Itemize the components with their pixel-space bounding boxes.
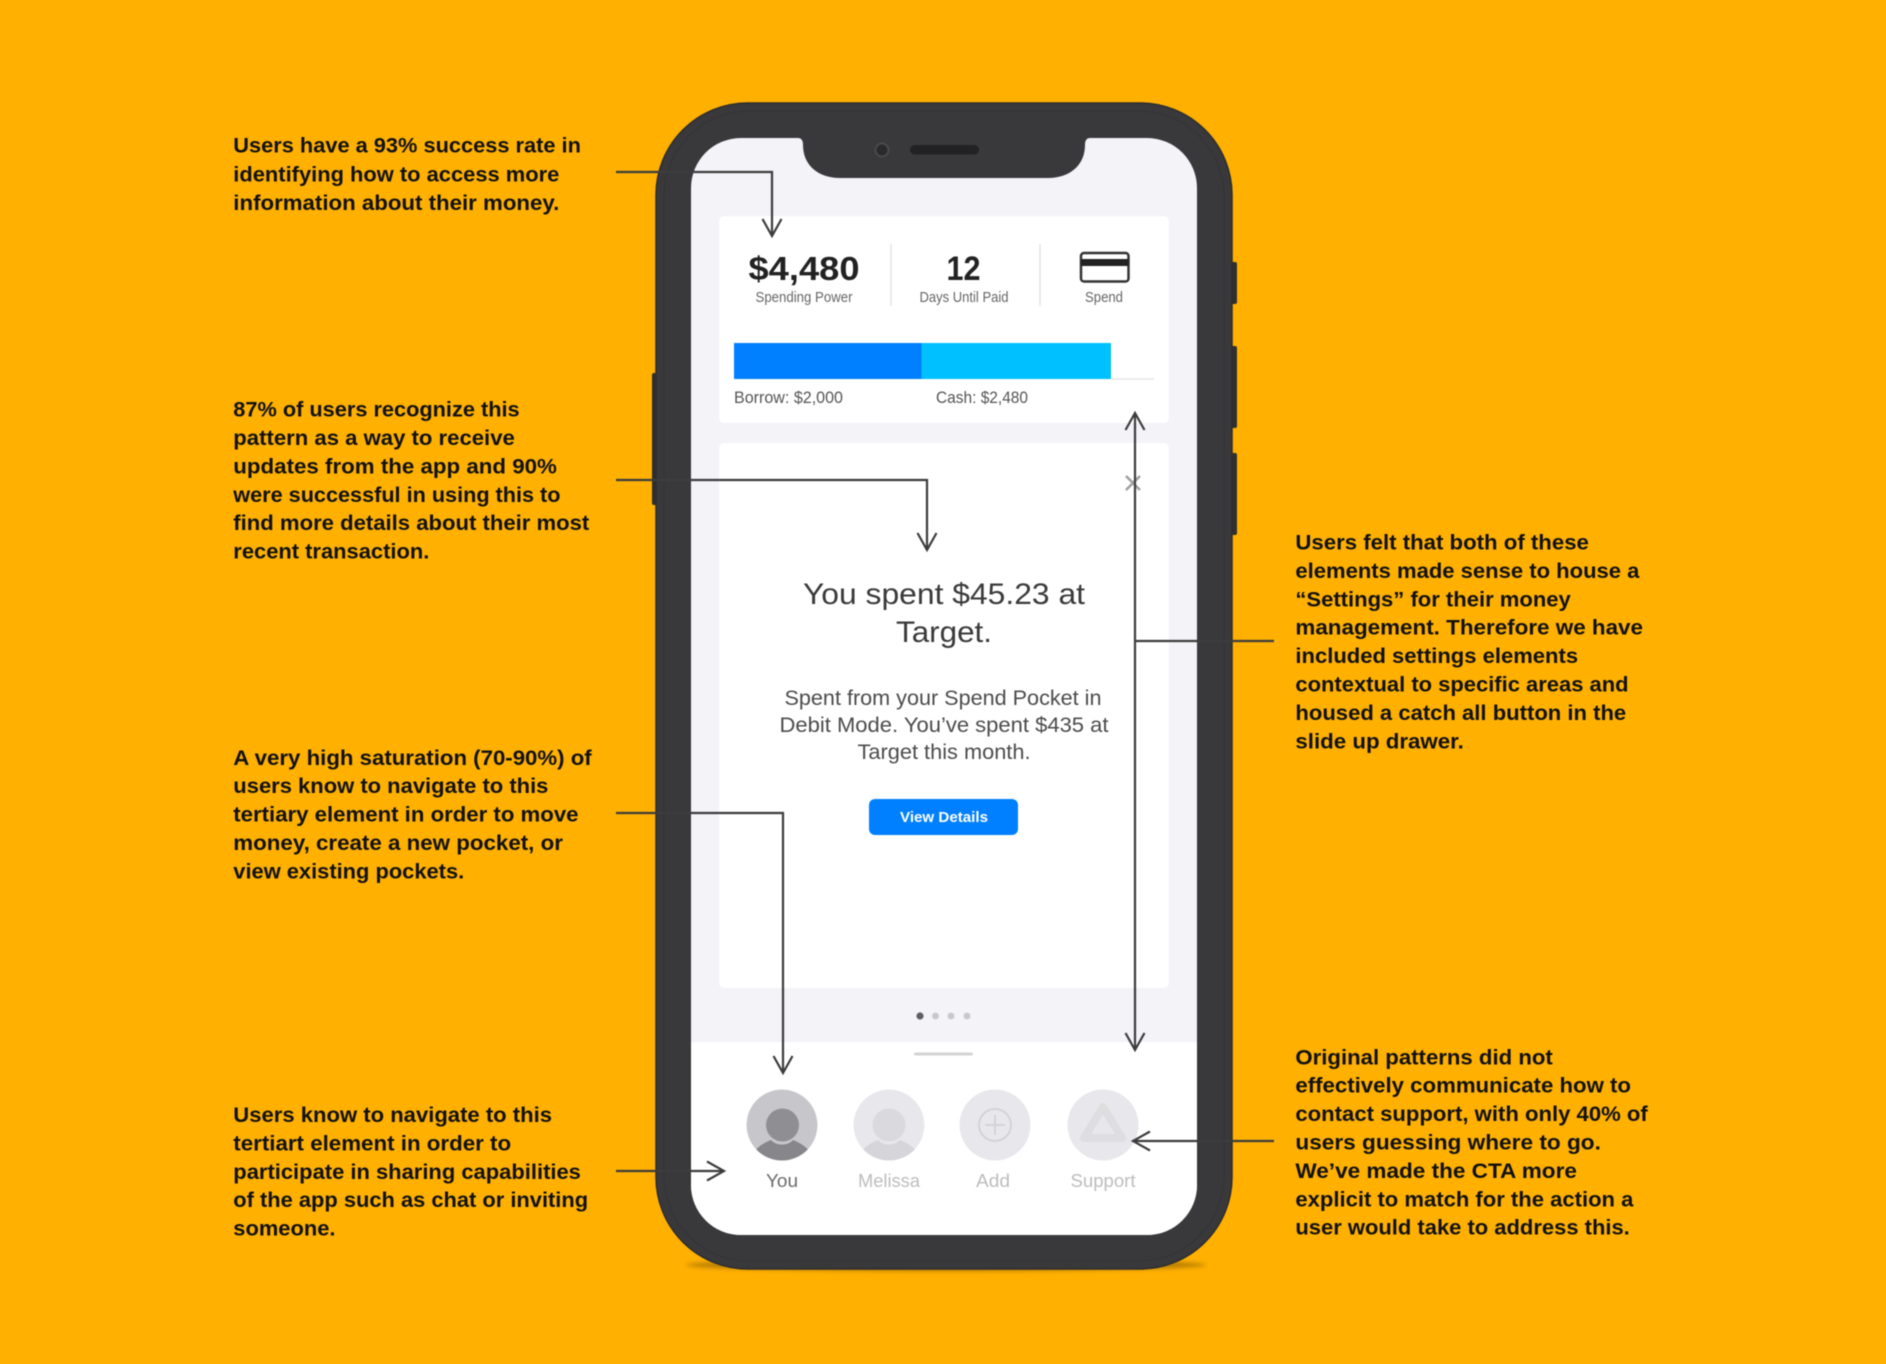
- arrow: settings bracket: [1126, 413, 1274, 1050]
- notification heading: You spent $45.23 at: [803, 578, 1085, 611]
- notification body: Debit Mode. You’ve spent $435 at: [780, 714, 1109, 737]
- callout: tertiary element saturation: view existing pockets.: [233, 859, 464, 883]
- view details button: [869, 799, 1018, 835]
- callout: sharing capabilities: of the app such as chat or inviting: [233, 1188, 588, 1212]
- bottom drawer: [691, 1042, 1197, 1235]
- callout: support: user would take to address this.: [1295, 1216, 1630, 1240]
- drag handle: [914, 1052, 973, 1056]
- callout: settings: contextual to specific areas and: [1295, 672, 1629, 696]
- arrow: to sharing area: [616, 1162, 724, 1180]
- icon: close: [1126, 476, 1140, 490]
- avatar: melissa: [854, 1090, 924, 1162]
- spending power label: Spending Power: [756, 290, 853, 306]
- callout: updates pattern: were successful in using this to: [232, 483, 560, 507]
- balance bar: [734, 343, 1154, 379]
- arrow: to notification card: [616, 480, 936, 550]
- callout: success rate: information about their money.: [233, 191, 559, 215]
- notch: [798, 138, 1090, 178]
- callout: tertiary element saturation: users know to navigate to this: [233, 774, 549, 798]
- callout: tertiary element saturation: [233, 746, 593, 883]
- pagination dots: [916, 1012, 970, 1020]
- borrow label: Borrow: $2,000: [734, 389, 843, 407]
- callout: updates pattern: find more details about their most: [233, 511, 589, 535]
- callout: tertiary element saturation: A very high saturation (70-90%) of: [233, 746, 593, 770]
- callout: support: users guessing where to go.: [1295, 1130, 1601, 1154]
- callout: tertiary element saturation: tertiary element in order to move: [233, 803, 579, 827]
- screen background: [691, 138, 1197, 1235]
- callout: tertiary element saturation: money, create a new pocket, or: [233, 831, 563, 855]
- phone body: [656, 103, 1232, 1269]
- days until paid label: Days Until Paid: [920, 290, 1008, 306]
- spending power value: $4,480: [748, 250, 860, 287]
- callout: settings: management. Therefore we have: [1295, 616, 1643, 640]
- support label: Support: [1070, 1171, 1136, 1191]
- arrow: to support: [1133, 1132, 1274, 1150]
- callout: updates pattern: pattern as a way to receive: [233, 426, 515, 450]
- callout: success rate: Users have a 93% success rate in: [233, 134, 581, 158]
- spend label: Spend: [1085, 290, 1123, 306]
- melissa label: Melissa: [858, 1171, 921, 1191]
- icon: spend card: [1081, 253, 1128, 282]
- callout: settings: housed a catch all button in the: [1295, 701, 1626, 725]
- view details button: View Details: [900, 809, 988, 826]
- callout: updates pattern: updates from the app and 90%: [233, 454, 557, 478]
- arrow: to you avatar: [616, 813, 792, 1073]
- add button: [960, 1090, 1030, 1160]
- callout: settings: [1295, 530, 1643, 753]
- add label: Add: [976, 1171, 1010, 1191]
- callout: settings: included settings elements: [1295, 644, 1578, 668]
- callout: settings: Users felt that both of these: [1295, 530, 1589, 554]
- side buttons: [652, 262, 1237, 535]
- notification card: [719, 443, 1169, 988]
- callout: updates pattern: 87% of users recognize this: [233, 398, 520, 422]
- arrow: to spending power: [616, 172, 782, 236]
- summary card: [719, 216, 1169, 423]
- callout: success rate: identifying how to access more: [233, 162, 559, 186]
- phone shadow: [686, 1259, 1206, 1271]
- callout: success rate: [233, 134, 581, 215]
- callout: sharing capabilities: [233, 1103, 588, 1241]
- notification heading: Target.: [896, 616, 992, 649]
- notification body: Spent from your Spend Pocket in: [784, 687, 1102, 710]
- phone mockup: [652, 103, 1237, 1271]
- screen: [691, 138, 1197, 1235]
- callout: settings: slide up drawer.: [1295, 729, 1464, 753]
- notification heading: [803, 578, 1085, 649]
- callout: support: explicit to match for the action a: [1295, 1187, 1635, 1211]
- callout: support: We’ve made the CTA more: [1295, 1159, 1577, 1183]
- you label: You: [766, 1171, 798, 1191]
- callout: sharing capabilities: participate in sharing capabilities: [233, 1160, 581, 1184]
- camera: [876, 144, 888, 156]
- callout: settings: elements made sense to house a: [1295, 559, 1641, 583]
- callout: settings: “Settings” for their money: [1295, 587, 1571, 611]
- callout: updates pattern: [232, 398, 589, 564]
- speaker: [910, 145, 979, 154]
- cash label: Cash: $2,480: [936, 389, 1028, 407]
- callout: sharing capabilities: someone.: [233, 1217, 336, 1241]
- days until paid value: 12: [946, 250, 980, 288]
- callout: sharing capabilities: Users know to navigate to this: [233, 1103, 552, 1127]
- callout: updates pattern: recent transaction.: [233, 540, 429, 564]
- avatar: you: [746, 1090, 818, 1162]
- callout: support: [1295, 1045, 1649, 1240]
- support button: [1068, 1090, 1138, 1160]
- notification body: Target this month.: [858, 741, 1030, 764]
- callout: support: Original patterns did not: [1295, 1045, 1553, 1069]
- callout: sharing capabilities: tertiart element in order to: [233, 1131, 511, 1155]
- callout: support: contact support, with only 40% of: [1295, 1102, 1649, 1126]
- callout: support: effectively communicate how to: [1295, 1074, 1631, 1098]
- notification body: [780, 687, 1109, 764]
